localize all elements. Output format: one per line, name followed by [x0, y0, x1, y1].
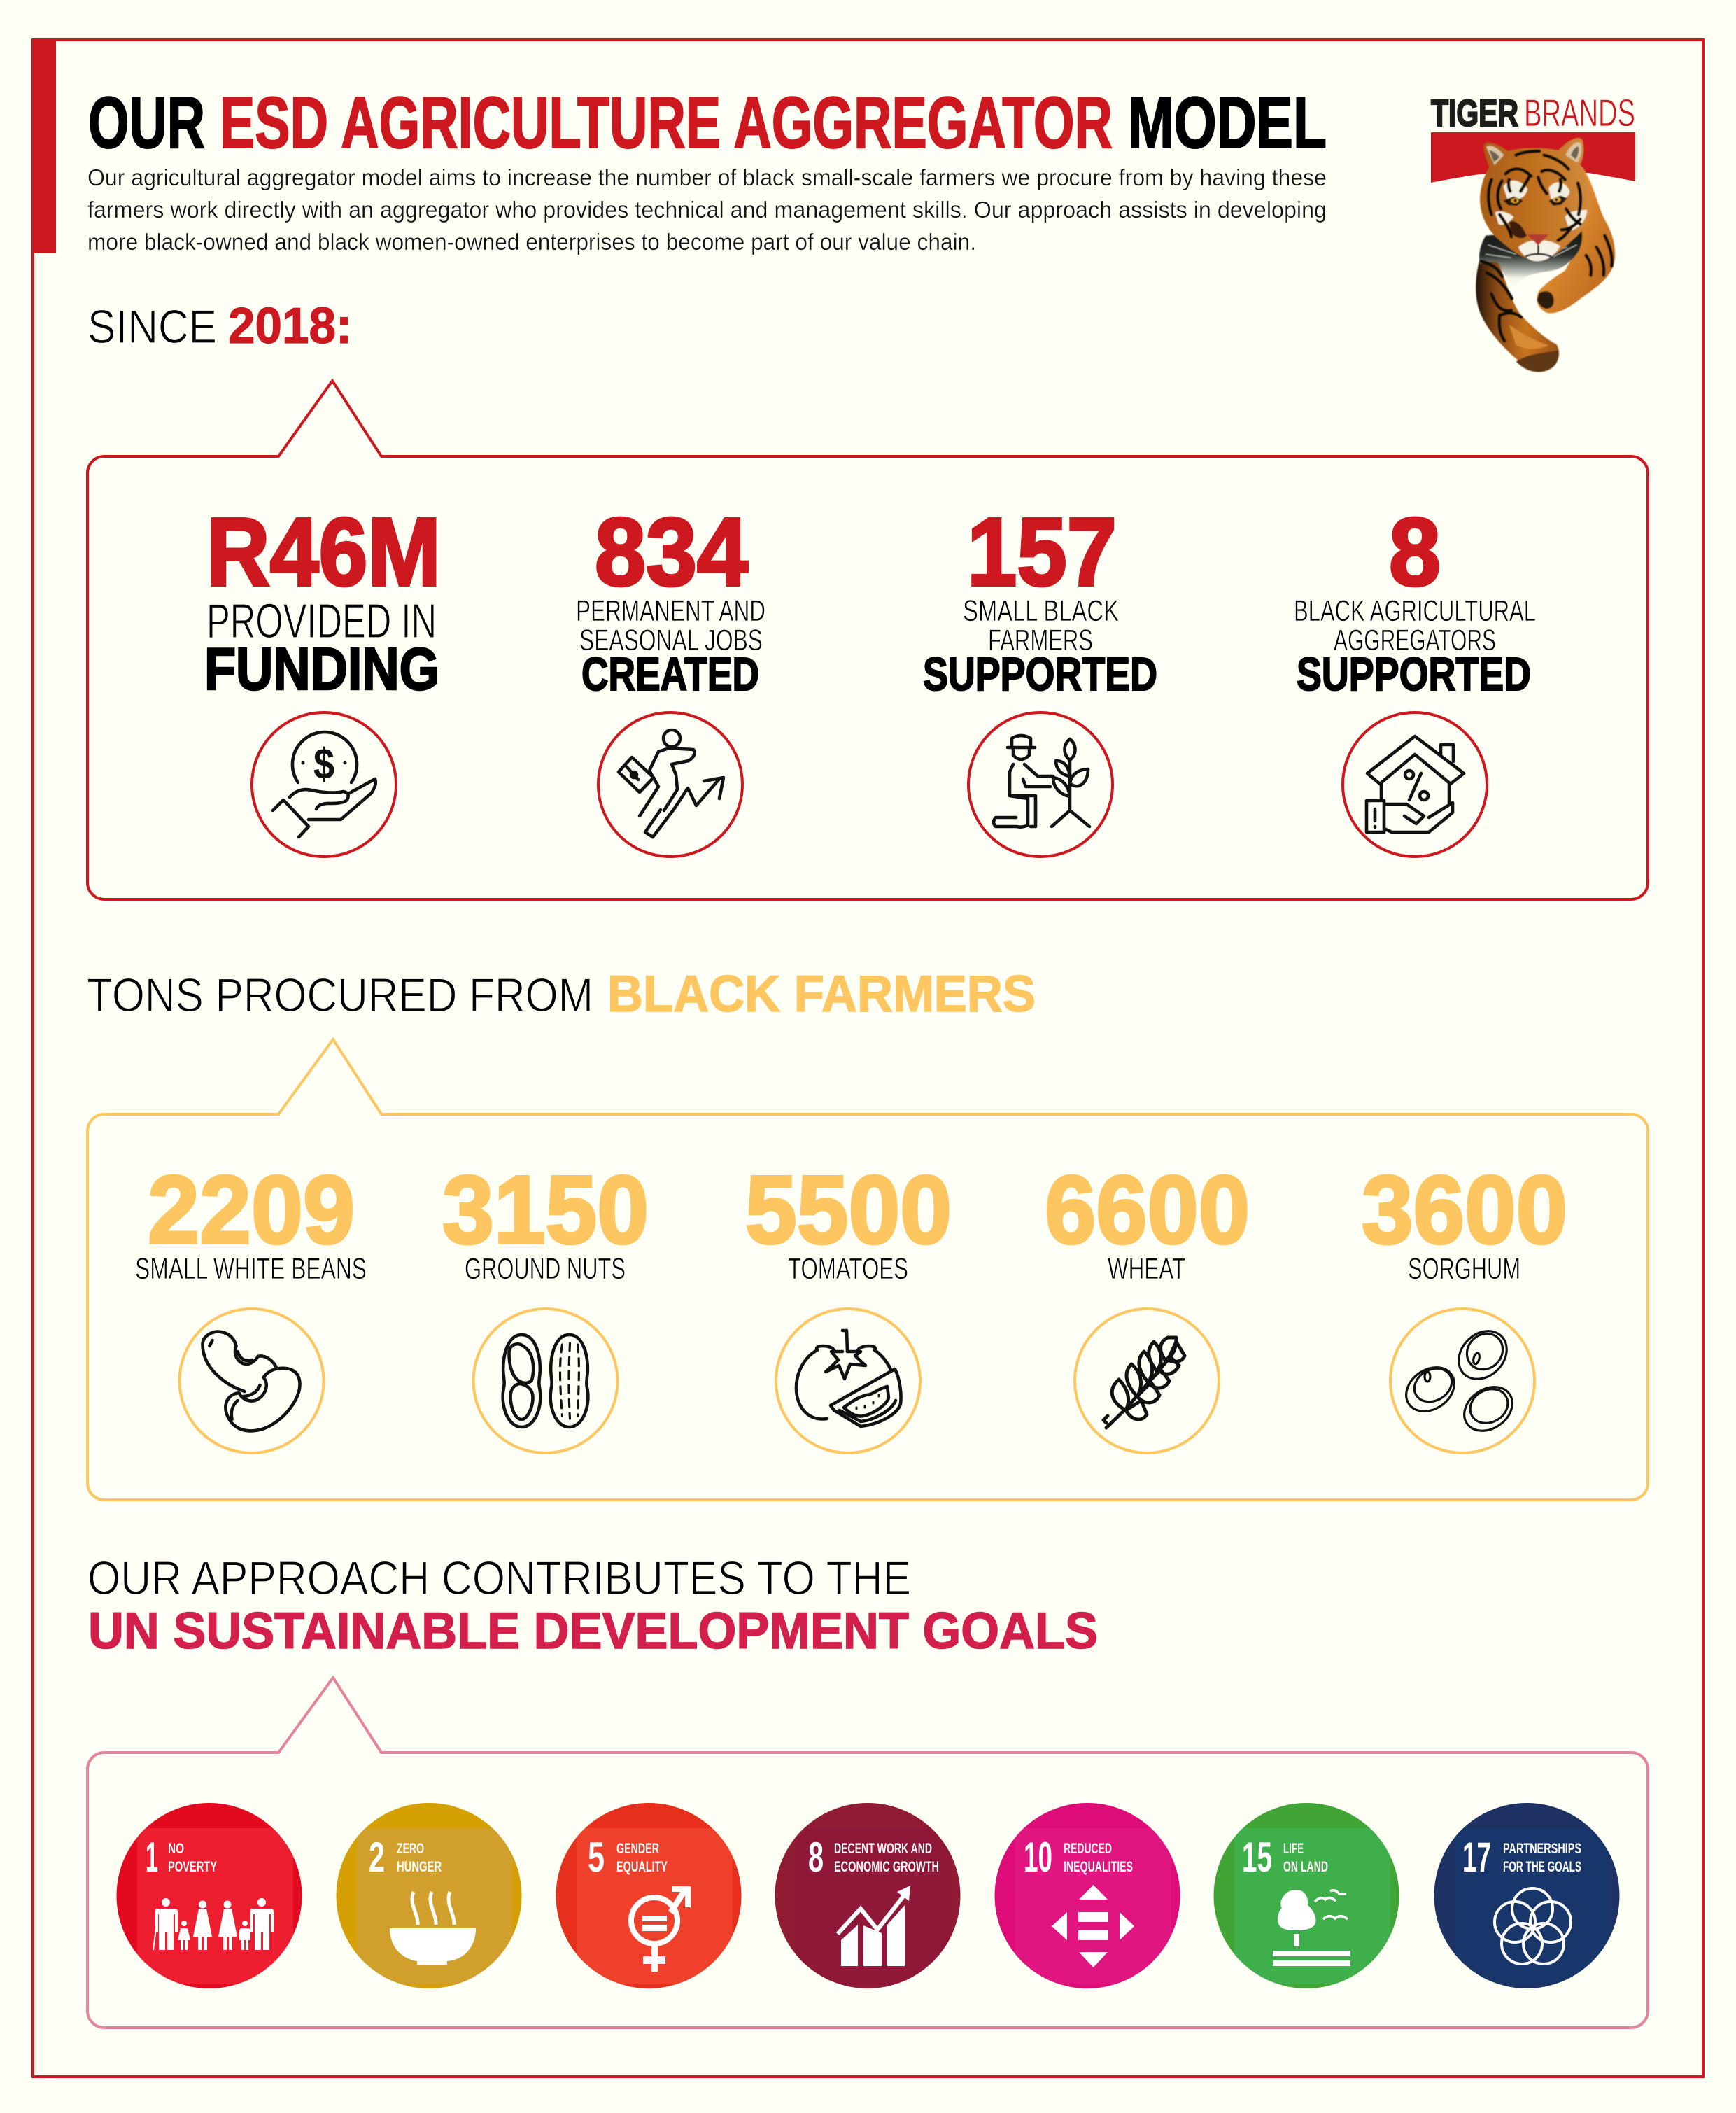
heading: since 2018: 2018: [228, 298, 352, 354]
SDG 15 badge [1213, 1803, 1399, 1988]
stat: 8 aggregators supported: BLACK AGRICULTURAL [1294, 594, 1536, 628]
stat: 8 aggregators supported: 8 [1389, 498, 1441, 606]
stat: 834 jobs created: PERMANENT AND [576, 594, 765, 628]
icon: hand holding coin: $ [313, 740, 334, 789]
tiger left arm [1476, 254, 1559, 372]
title: OUR [88, 83, 205, 164]
SDG 5 badge: GENDER [616, 1841, 659, 1857]
SDG 2 badge: ZERO [397, 1841, 424, 1857]
heading: UN goals: UN SUSTAINABLE DEVELOPMENT GOALS [88, 1603, 1098, 1659]
icon: family [153, 1898, 274, 1950]
stat: ground nuts: 3150 [442, 1156, 649, 1264]
stat: wheat: WHEAT [1108, 1252, 1185, 1286]
logo wordmark: BRANDS [1524, 91, 1635, 134]
SDG 5 badge: EQUALITY [616, 1859, 668, 1875]
intro text block: Our agricultural aggregator model aims to increase the number of black small-scale farmers we procure from by having these [87, 164, 1327, 190]
stat: R46M funding [204, 498, 441, 857]
tiger chest [1479, 229, 1582, 287]
panel outline with pointer [87, 381, 1648, 899]
SDG 5 badge: 5 [588, 1834, 605, 1881]
intro text block [87, 164, 1327, 255]
SDG 2 badge [336, 1803, 522, 1988]
SDG 1 badge: POVERTY [168, 1859, 217, 1875]
icon: sorghum grains [1390, 1309, 1534, 1453]
logo tiger illustration [1476, 138, 1615, 372]
stat: 8 aggregators supported: SUPPORTED [1297, 648, 1531, 701]
stat: tomatoes: 5500 [745, 1156, 952, 1264]
icon: inequality arrows [1052, 1885, 1134, 1967]
icon: growth bars and arrow [838, 1886, 910, 1966]
SDG 1 badge [116, 1803, 302, 1988]
heading: tons procured [87, 966, 1036, 1023]
intro text block: more black-owned and black women-owned enterprises to become part of our value chain. [87, 229, 976, 255]
heading: UN goals: OUR APPROACH CONTRIBUTES TO THE [87, 1552, 911, 1605]
icon: peanuts [473, 1309, 617, 1453]
icon: farmer with plant [968, 712, 1113, 857]
SDG 17 badge: PARTNERSHIPS [1503, 1841, 1581, 1857]
icon: tree, birds and land [1273, 1890, 1350, 1966]
icon: house on hand with percent [1343, 712, 1487, 857]
stat: 834 jobs created [576, 498, 765, 857]
stat: 834 jobs created: SEASONAL JOBS [579, 624, 763, 657]
title: ESD AGRICULTURE AGGREGATOR [220, 83, 1113, 164]
SDG 2 badge: HUNGER [397, 1859, 442, 1875]
SDG 5 badge [556, 1803, 742, 1988]
logo wordmark [1431, 91, 1635, 134]
stat: 834 jobs created: CREATED [581, 648, 759, 701]
icon: wheat ear [1075, 1309, 1219, 1453]
icon: beans [179, 1309, 323, 1453]
tiger head [1480, 138, 1590, 260]
heading: since 2018 [87, 298, 352, 354]
SDG 10 badge [995, 1803, 1180, 1988]
stat: R46M funding: R46M [206, 498, 441, 606]
logo: Tiger Brands [1431, 91, 1635, 372]
icon: runner with growth arrow [598, 712, 742, 857]
SDG 15 badge: LIFE [1283, 1841, 1304, 1857]
stat: 8 aggregators supported [1294, 498, 1536, 857]
SDG 17 badge [1434, 1803, 1619, 1988]
SDG 10 badge: 10 [1024, 1834, 1052, 1881]
stat: small white beans: SMALL WHITE BEANS [135, 1252, 367, 1286]
heading: tons procured: BLACK FARMERS [607, 966, 1036, 1023]
SDG 2 badge: 2 [369, 1834, 385, 1881]
logo wordmark: TIGER [1431, 92, 1518, 134]
tiger right arm [1537, 164, 1615, 314]
stat: 157 farmers supported: SUPPORTED [923, 648, 1157, 701]
SDG 10 badge: INEQUALITIES [1064, 1859, 1133, 1875]
icon: tomato and slice [776, 1309, 920, 1453]
panel: tons procured [87, 1039, 1648, 1500]
SDG 15 badge: 15 [1242, 1834, 1272, 1881]
stat: tomatoes [745, 1156, 952, 1453]
heading: UN goals [87, 1552, 1098, 1659]
stat: 157 farmers supported: 157 [967, 498, 1117, 606]
SDG 8 badge: ECONOMIC GROWTH [834, 1859, 939, 1875]
stat: R46M funding: FUNDING [204, 636, 439, 703]
stat: 157 farmers supported [923, 498, 1157, 857]
stat: wheat: 6600 [1045, 1156, 1250, 1264]
SDG 17 badge: FOR THE GOALS [1503, 1859, 1581, 1875]
stat: 157 farmers supported: SMALL BLACK [963, 594, 1119, 628]
heading: since 2018: SINCE [87, 300, 217, 353]
stat: ground nuts: GROUND NUTS [465, 1252, 626, 1286]
panel outline with pointer [87, 1678, 1648, 2028]
stat: sorghum: 3600 [1362, 1156, 1567, 1264]
icon: gender symbol [631, 1886, 691, 1972]
SDG 15 badge: ON LAND [1283, 1859, 1328, 1875]
intro text block: farmers work directly with an aggregator who provides technical and management skills. Our approach assists in developing [87, 197, 1327, 223]
stat: wheat [1045, 1156, 1250, 1453]
icon: bowl with steam [390, 1892, 476, 1965]
logo banner [1431, 132, 1635, 183]
stat: sorghum: SORGHUM [1408, 1252, 1520, 1286]
panel: since 2018 stats [87, 381, 1648, 899]
SDG 17 badge: 17 [1462, 1834, 1491, 1881]
icon: hand holding coin [252, 712, 396, 857]
icon: five interlocked rings [1495, 1888, 1571, 1964]
stat: tomatoes: TOMATOES [788, 1252, 908, 1286]
stat: sorghum [1362, 1156, 1567, 1453]
stat: 8 aggregators supported: AGGREGATORS [1334, 624, 1496, 657]
stat: 157 farmers supported: FARMERS [988, 624, 1093, 657]
stat: R46M funding: PROVIDED IN [206, 594, 437, 648]
SDG 10 badge: REDUCED [1064, 1841, 1112, 1857]
stat: ground nuts [442, 1156, 649, 1453]
SDG 8 badge: DECENT WORK AND [834, 1841, 932, 1857]
stat: small white beans: 2209 [148, 1156, 355, 1264]
stat: 834 jobs created: 834 [595, 498, 748, 606]
panel: sustainable development goals [87, 1678, 1648, 2028]
panel outline with pointer [87, 1039, 1648, 1500]
SDG 1 badge: 1 [146, 1834, 158, 1881]
SDG 8 badge [775, 1803, 960, 1988]
title: MODEL [1128, 83, 1327, 164]
SDG 8 badge: 8 [808, 1834, 824, 1881]
stat: small white beans [135, 1156, 367, 1453]
header accent bar [31, 38, 56, 253]
heading: tons procured: TONS PROCURED FROM [87, 969, 593, 1022]
SDG 1 badge: NO [168, 1841, 184, 1857]
